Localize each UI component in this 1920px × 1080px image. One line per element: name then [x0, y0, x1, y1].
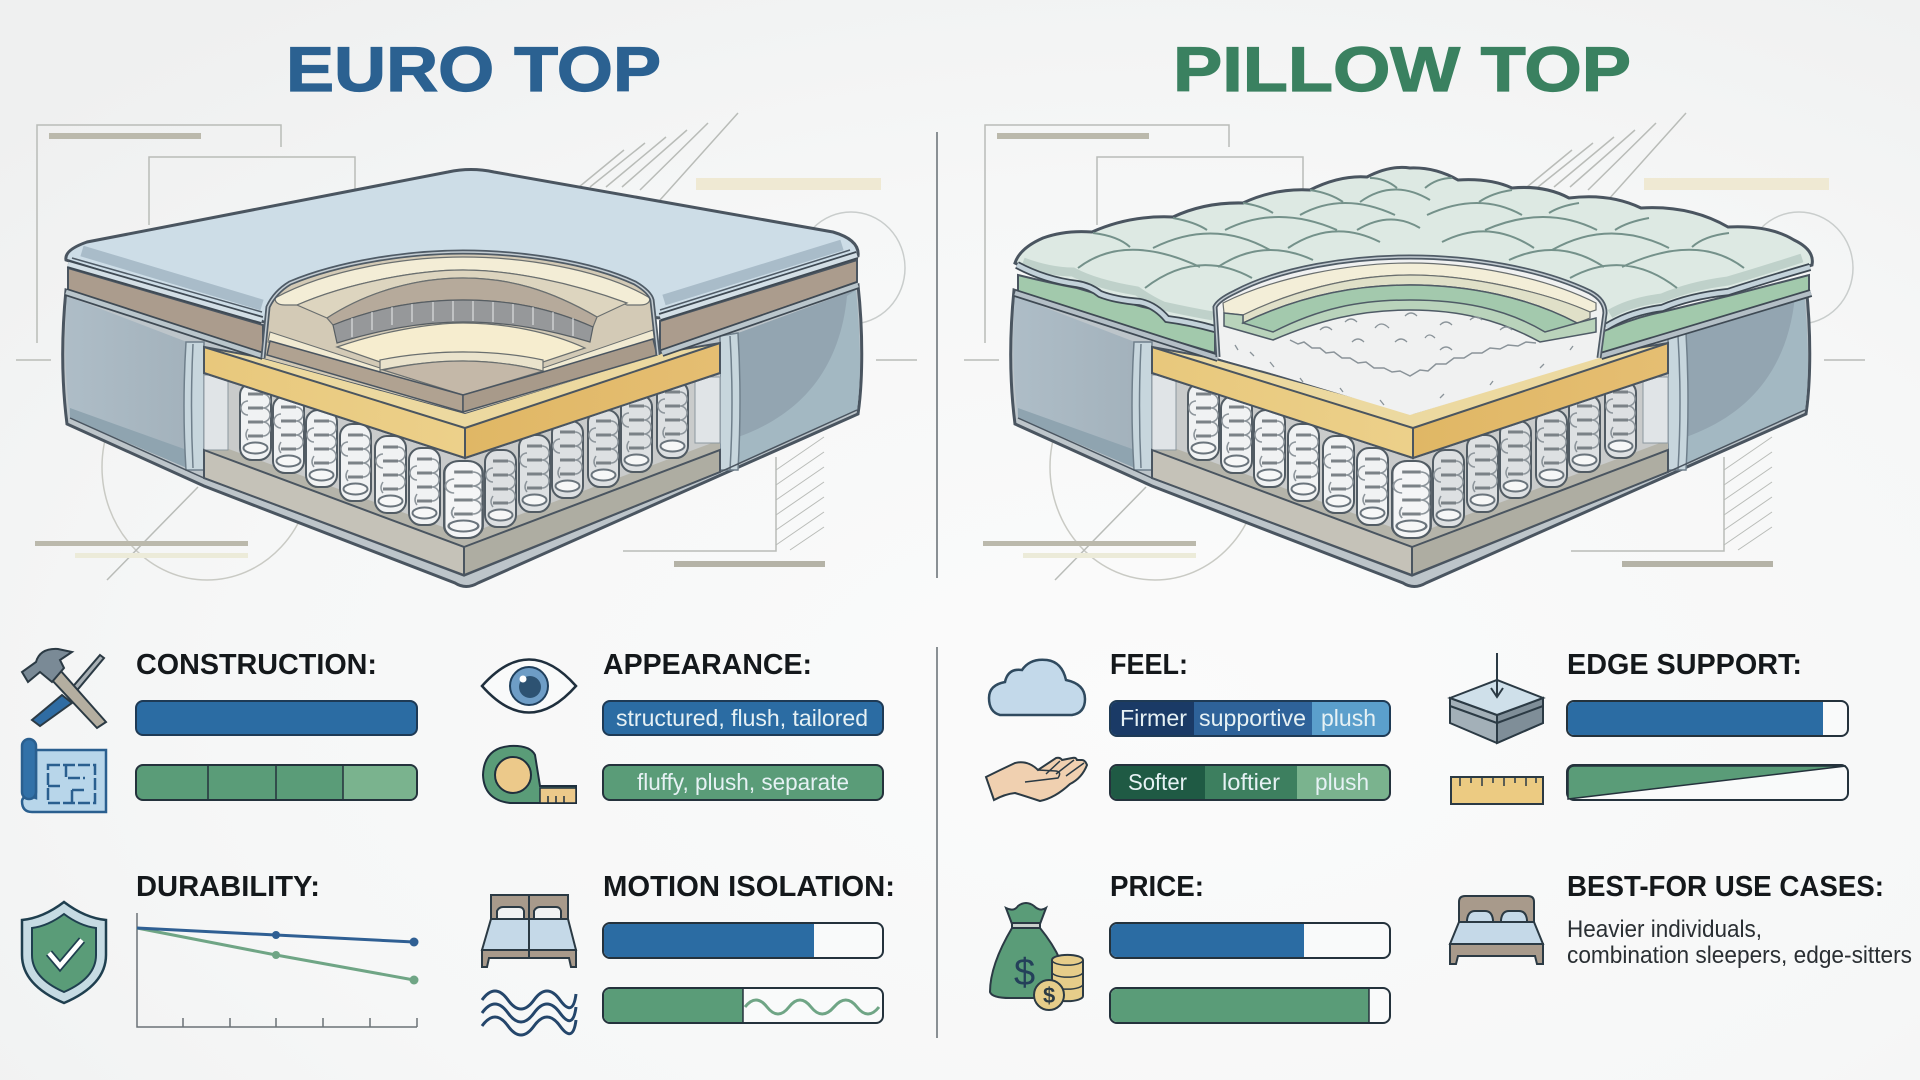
panel: Appearance [482, 649, 883, 803]
bar: construction Pillow [136, 765, 417, 800]
icon: bed [1450, 896, 1543, 964]
line chart: durability over time [137, 913, 418, 1027]
heading: Motion isolation: MOTION ISOLATION: [603, 871, 895, 903]
icon: pressed edge box [1450, 653, 1543, 743]
illustration: Euro top mattress cutaway [63, 170, 862, 586]
quilted top [1015, 167, 1812, 330]
title: Euro Top: EURO TOP [286, 35, 661, 105]
green band [1018, 275, 1809, 355]
bar: feel Euro: plush [1321, 705, 1376, 731]
bar: feel Pillow: loftier [1222, 769, 1280, 795]
heading: Feel: FEEL: [1110, 649, 1188, 681]
bar: feel Euro: Firmer [1120, 705, 1187, 731]
panel: Motion isolation [482, 871, 895, 1035]
bar: structured, flush, tailored [603, 701, 883, 735]
heading: Appearance: APPEARANCE: [603, 649, 812, 681]
bar: fluffy, plush, separate [603, 765, 883, 800]
bar: feel Pillow: plush [1315, 769, 1369, 795]
bar: feel Euro [1110, 701, 1390, 736]
bar: fluffy, plush, separate: fluffy, plush, separate [637, 769, 849, 795]
heading: Durability: DURABILITY: [136, 871, 320, 903]
icon: hammer and screwdriver [22, 649, 106, 728]
icon: shield [22, 902, 106, 1003]
cutaway layers [263, 252, 658, 413]
bar: feel Euro: supportive [1199, 705, 1306, 731]
bar: motion isolation Pillow [603, 988, 883, 1023]
icon: blueprint [22, 739, 106, 812]
panel: Durability [22, 871, 418, 1027]
icon: cloud [989, 660, 1085, 715]
bar: motion isolation Euro [603, 923, 883, 958]
panel: Feel [986, 649, 1390, 801]
quilting tufts [1078, 178, 1744, 288]
bar: edge support Euro [1567, 701, 1848, 736]
icon: split bed [482, 895, 576, 967]
text: use cases: Heavier individuals, [1567, 916, 1762, 943]
bar: structured, flush, tailored: structured, flush, tailored [616, 705, 868, 731]
panel: Construction [22, 649, 417, 812]
illustration: Pillow top mattress cutaway [1011, 167, 1812, 586]
icon: tape measure [483, 746, 576, 803]
title: Pillow Top: PILLOW TOP [1173, 35, 1631, 105]
panel: Price [990, 871, 1390, 1023]
cutaway layers with fiber fill [1215, 257, 1605, 415]
bar: construction Euro [136, 701, 417, 735]
icon: eye [482, 660, 576, 712]
heading: Best-for use cases: BEST-FOR USE CASES: [1567, 871, 1884, 903]
icon: ruler [1451, 777, 1543, 804]
heading: Price: PRICE: [1110, 871, 1204, 903]
icon: waves [482, 991, 576, 1035]
bar: feel Pillow [1110, 765, 1390, 800]
heading: Construction: CONSTRUCTION: [136, 649, 377, 681]
top surface [66, 170, 858, 322]
heading: Edge support: EDGE SUPPORT: [1567, 649, 1802, 681]
panel: Best-for use cases [1450, 871, 1912, 969]
icon: money bag and coins: $ [1014, 952, 1035, 994]
bar: price Pillow [1110, 988, 1390, 1023]
bar: edge support Pillow [1567, 765, 1848, 800]
bar: price Euro [1110, 923, 1390, 958]
bar: feel Pillow: Softer [1128, 769, 1187, 795]
icon: money bag and coins: $ [1043, 983, 1055, 1008]
brown band [68, 260, 857, 354]
panel: Edge support [1450, 649, 1848, 804]
text: use cases [1567, 916, 1912, 969]
icon: money bag and coins [990, 903, 1083, 1010]
icon: hand [986, 758, 1087, 801]
